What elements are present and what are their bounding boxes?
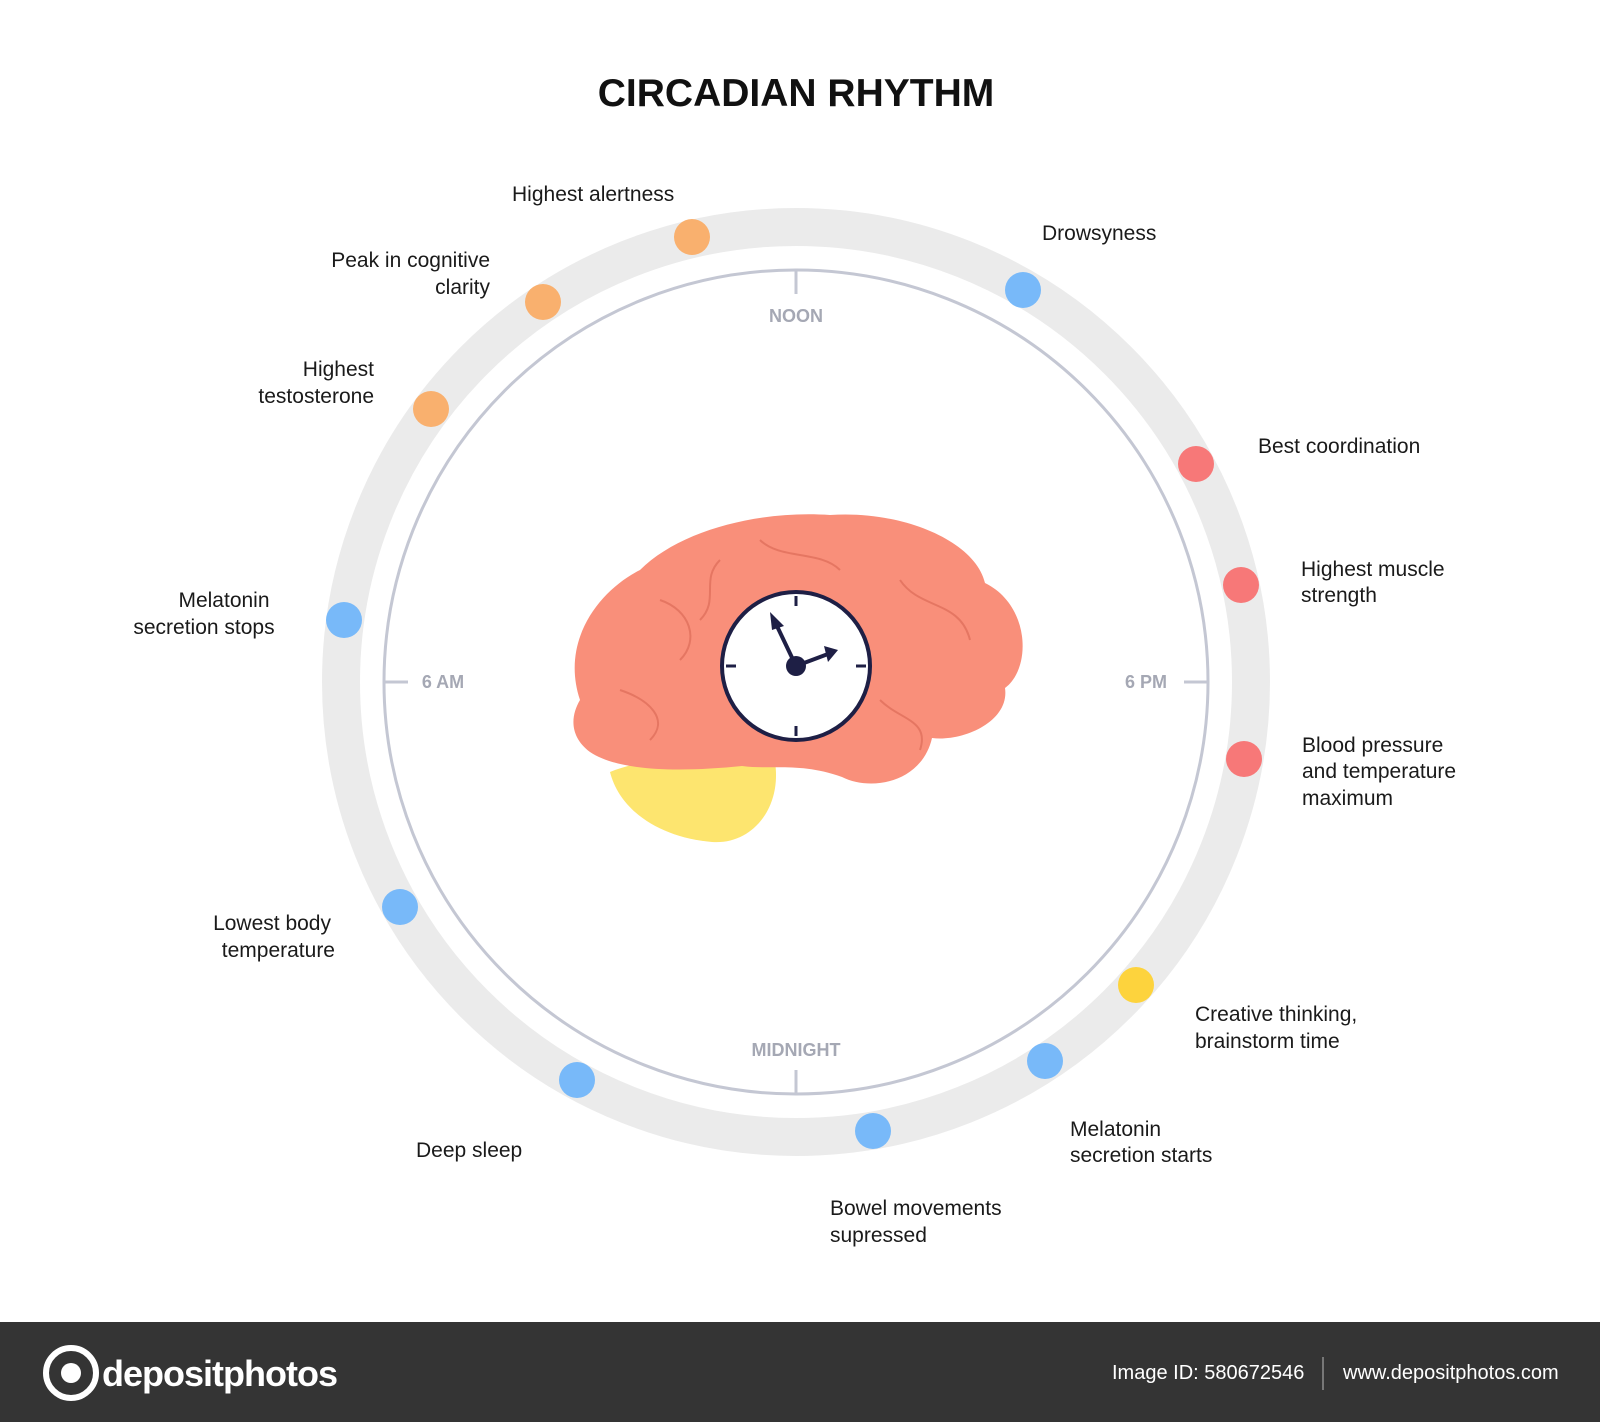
dots — [326, 219, 1262, 1149]
labels: temperature — [222, 939, 335, 962]
logo — [46, 1348, 96, 1398]
time labels: NOON — [769, 306, 823, 326]
labels: Highest muscle — [1301, 558, 1445, 581]
title: CIRCADIAN RHYTHM — [598, 72, 994, 115]
footer bar: Image ID: 580672546 — [1112, 1362, 1304, 1384]
footer bar: depositphotos — [102, 1353, 337, 1394]
labels: Blood pressure — [1302, 734, 1443, 757]
labels: Highest alertness — [512, 183, 674, 206]
labels: secretion stops — [133, 616, 275, 639]
brain illustration — [573, 514, 1023, 842]
labels: Best coordination — [1258, 435, 1420, 458]
labels: Deep sleep — [416, 1139, 522, 1162]
labels: testosterone — [258, 385, 374, 408]
labels: Drowsyness — [1042, 222, 1156, 245]
footer bar — [0, 1322, 1600, 1422]
labels: and temperature — [1302, 760, 1456, 783]
labels: Melatonin — [178, 589, 270, 612]
labels: maximum — [1302, 787, 1393, 810]
labels: Creative thinking, — [1195, 1003, 1357, 1026]
labels: Melatonin — [1070, 1118, 1161, 1141]
time labels: 6 PM — [1125, 672, 1167, 692]
labels: Lowest body — [213, 912, 331, 935]
footer bar: www.depositphotos.com — [1342, 1362, 1559, 1384]
inner clock circle — [384, 270, 1208, 1094]
labels: Bowel movements — [830, 1197, 1002, 1220]
labels: Highest — [303, 358, 374, 381]
clock icon — [722, 592, 870, 740]
time labels: MIDNIGHT — [752, 1040, 840, 1060]
labels: brainstorm time — [1195, 1030, 1340, 1053]
outer ring — [341, 227, 1251, 1137]
labels: strength — [1301, 584, 1377, 607]
time labels: 6 AM — [422, 672, 464, 692]
time labels — [422, 306, 1167, 1060]
labels: Peak in cognitive — [331, 249, 490, 272]
labels: clarity — [435, 276, 490, 299]
labels — [133, 183, 1456, 1247]
labels: supressed — [830, 1224, 927, 1247]
labels: secretion starts — [1070, 1144, 1212, 1167]
